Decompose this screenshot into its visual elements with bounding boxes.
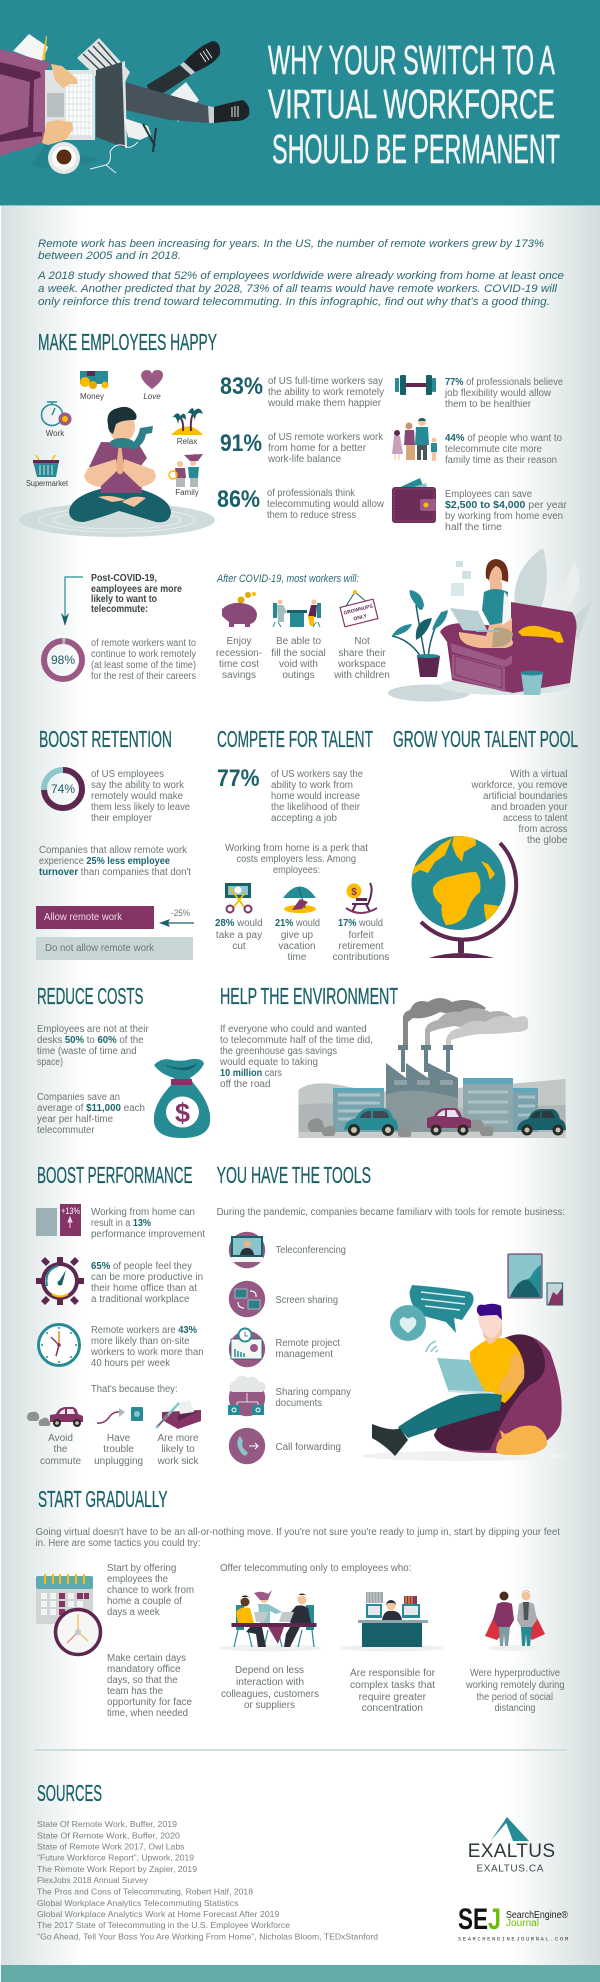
stat: 86% stress: them to reduce stress <box>267 510 356 521</box>
text: turnover: turnover than companies that don't <box>39 867 191 878</box>
stat: 91% balance: from home for a better <box>268 443 367 454</box>
text: hyperproductive: the period of social <box>476 1692 553 1703</box>
text: not at desks: desks 50% to 60% of the <box>37 1035 144 1046</box>
text: children: Not <box>354 636 370 647</box>
text: 13% <box>91 1207 205 1240</box>
icon: purple car <box>427 1108 471 1136</box>
text: less interaction <box>221 1665 319 1711</box>
text: vacation: time <box>288 952 307 963</box>
icon: piggy bank <box>222 592 257 627</box>
text: pay cut: take a pay <box>216 930 262 941</box>
text: 43%: 40 hours per week <box>91 1358 171 1369</box>
text: 98% stat: (at least some of the time) <box>91 660 196 671</box>
sources list: The Pros and Cons of Telecommuting, Robert Half, 2018 <box>37 1887 253 1897</box>
sources list: State Of Remote Work, Buffer, 2019 <box>37 1819 177 1829</box>
stat: savings: $2,500 to $4,000 per year <box>445 500 568 511</box>
stat: 91% balance: 91% <box>220 430 262 457</box>
illustration: person working on laptop from above <box>0 34 249 174</box>
panel: grow your talent pool <box>393 726 578 958</box>
stat: 91% balance: work-life balance <box>267 454 341 465</box>
text: turnover: experience 25% less employee <box>39 856 170 867</box>
illustration: man in beanbag with laptop <box>361 1254 565 1461</box>
heading: YOU HAVE THE TOOLS <box>217 1162 371 1188</box>
illustration: focused worker at desk <box>340 1592 444 1652</box>
text: 74% stat: them less likely to leave <box>91 802 190 813</box>
title <box>268 37 560 172</box>
illustration: globe <box>412 835 516 958</box>
text: 13%: result in a 13% <box>91 1218 151 1229</box>
text: social void: void with <box>279 659 318 670</box>
text: 74% stat: their employer <box>91 813 153 824</box>
text: greenhouse savings: would equate to taking <box>219 1057 318 1068</box>
stat: 83% happier: the ability to work remotely <box>268 387 384 398</box>
text: greenhouse savings: 10 million cars <box>220 1068 282 1079</box>
text: children: workspace <box>337 659 386 670</box>
tool: screen sharing <box>229 1281 338 1317</box>
tool: call forwarding: Call forwarding <box>276 1442 341 1453</box>
text: avoid: commute <box>40 1456 81 1467</box>
icon: grownups only sign: GROWNUPS <box>343 603 374 617</box>
sources list: State Of Remote Work, Buffer, 2020 <box>37 1830 180 1840</box>
illustration: factory, buildings and cars <box>298 998 566 1138</box>
text: 43%: workers to work more than <box>90 1347 204 1358</box>
text: complex tasks <box>350 1668 436 1714</box>
callout: post-COVID heading: telecommute: <box>91 604 148 615</box>
text: start intro: Going virtual doesn't have to be an all-or-nothing move. If you're not sure you're ready to jump in, start by dipping your feet <box>36 1527 560 1538</box>
text: virtual workforce: artificial boundaries <box>483 791 568 802</box>
text: 74% stat: remotely would make <box>91 791 183 802</box>
text: not at desks: time (waste of time and <box>37 1046 137 1057</box>
panel: boost retention <box>36 726 194 960</box>
text: unplugging: Have <box>107 1433 131 1444</box>
text: sick: likely to <box>161 1444 195 1455</box>
text: hyperproductive <box>465 1668 564 1714</box>
tool: teleconferencing <box>229 1232 346 1268</box>
bar chart: +13%: +13% <box>61 1206 80 1216</box>
intro text: a week. Another predicted that by 2028, 73% of all teams would have remote workers. COVID-19 will <box>38 283 558 295</box>
heading: BOOST RETENTION <box>39 726 172 752</box>
text: 74% stat: of US employees <box>91 769 164 780</box>
icon: relax island <box>171 408 203 446</box>
text: 65%: their home office than at <box>91 1283 197 1294</box>
text: cost savings: savings <box>222 670 256 681</box>
text: less interaction: interaction with <box>236 1677 304 1688</box>
text: tools intro: During the pandemic, companies became familiarv with tools for remote business: <box>217 1207 565 1218</box>
stat: 77% healthier: job flexibility would allow <box>444 388 552 399</box>
stat: 77% healthier: them to be healthier <box>445 399 532 410</box>
tool: sharing documents: documents <box>276 1398 322 1409</box>
text: complex tasks: Are responsible for <box>350 1668 436 1679</box>
text: turnover <box>39 845 191 878</box>
icon: money bag: $ <box>175 1098 190 1128</box>
text: retirement: 17% would <box>338 918 383 929</box>
sources list: Global Workplace Analytics Work at Home Forecast After 2019 <box>37 1909 280 1919</box>
stat: 77%: ability to work from <box>271 780 353 791</box>
text: vacation <box>275 918 320 963</box>
intro text: A 2018 study showed that 52% of employees worldwide were already working from home at least once <box>37 270 564 282</box>
text: because: That's because they: <box>91 1384 178 1395</box>
text: turnover: Companies that allow remote work <box>39 845 188 856</box>
logo: Search Engine Journal: SE <box>458 1903 488 1936</box>
icon: grownups only sign <box>340 590 378 627</box>
logo: Exaltus: EXALTUS <box>468 1841 555 1862</box>
text: social void <box>271 636 326 681</box>
text: tactic one: home a couple of <box>107 1596 182 1607</box>
stat: 44% family time: family time as their reason <box>445 455 557 466</box>
header banner <box>0 0 600 206</box>
tool: project management: management <box>276 1349 333 1360</box>
logo: Search Engine Journal: SEARCHENGINEJOURNAL.COM <box>458 1936 568 1943</box>
text: tactic two: mandatory office <box>107 1664 181 1675</box>
callout: post-COVID heading <box>91 573 182 615</box>
text: perk: costs employers less. Among <box>236 854 356 865</box>
donut chart: 98% <box>43 640 83 680</box>
text: 13%: performance improvement <box>91 1229 205 1240</box>
text: unplugging: unplugging <box>94 1456 143 1467</box>
text: virtual workforce: With a virtual <box>510 769 568 780</box>
heading: MAKE EMPLOYEES HAPPY <box>38 329 217 355</box>
text: children <box>333 636 390 681</box>
text: not at desks: space) <box>37 1057 63 1068</box>
text: 65%: a traditional workplace <box>91 1294 190 1305</box>
text: 65% <box>91 1261 203 1305</box>
logo: Search Engine Journal <box>458 1903 569 1943</box>
sources list: "Future Workforce Report", Upwork, 2019 <box>37 1853 194 1863</box>
icon: love: Love <box>143 392 161 401</box>
heading: REDUCE COSTS <box>37 983 144 1009</box>
heading: START GRADUALLY <box>38 1486 168 1512</box>
stat: 86% stress: 86% <box>217 486 260 513</box>
text: vacation: 21% would <box>275 918 320 929</box>
icon: cut pay <box>225 883 252 912</box>
icon: clock <box>38 1324 80 1366</box>
icon: supermarket basket <box>26 455 69 488</box>
text: 74% stat: say the ability to work <box>91 780 185 791</box>
donut chart: 98%: 98% <box>51 653 75 667</box>
text: 13%: Working from home can <box>91 1207 195 1218</box>
icon: plug <box>97 1407 143 1423</box>
icon: wallet <box>392 478 436 523</box>
heading: SOURCES <box>37 1780 102 1806</box>
text: unplugging <box>94 1433 143 1467</box>
donut chart: 74%: 74% <box>51 782 75 796</box>
text: retirement: forfeit <box>348 930 374 941</box>
donut chart: 74% <box>44 770 82 808</box>
icon: supermarket basket: Supermarket <box>26 479 69 488</box>
icon: relax island: Relax <box>177 437 197 446</box>
stat: 91% balance <box>220 430 384 465</box>
stat: 77%: of US workers say the <box>271 769 363 780</box>
icon: money bag <box>154 1059 210 1138</box>
icon: work stopwatch and gear <box>42 402 72 438</box>
text: perk: Working from home is a perk that <box>225 843 368 854</box>
text: greenhouse savings: to telecommute half of the time did, <box>220 1035 373 1046</box>
text: sick: Are more <box>157 1433 199 1444</box>
text: children: share their <box>338 648 386 659</box>
arrow: down to donut <box>61 577 83 626</box>
sources list: State of Remote Work 2017, Owl Labs <box>37 1842 185 1852</box>
sources list: "Go Ahead, Tell Your Boss You Are Working From Home", Nicholas Bloom, TEDxStanford <box>37 1931 378 1941</box>
text: vacation: vacation <box>278 941 316 952</box>
callout: post-COVID heading: eamployees are more <box>91 584 182 595</box>
stat: savings: half the time <box>445 522 502 533</box>
stat: 44% family time: 44% of people who want to <box>445 433 562 444</box>
text: tactic two: days, so that the <box>107 1675 178 1686</box>
text: perk <box>225 843 368 876</box>
text: social void: fill the social <box>271 648 326 659</box>
stat: 86% stress: telecommuting would allow <box>267 499 385 510</box>
icon: calendar and clock <box>36 1574 100 1654</box>
text: savings: year per half-time <box>37 1114 113 1125</box>
tool: sharing documents: Sharing company <box>276 1387 351 1398</box>
intro text <box>37 238 564 308</box>
subheading: after COVID: After COVID-19, most workers will: <box>216 573 359 585</box>
stat: 83% happier: 83% <box>220 373 263 400</box>
text: start intro: in. Here are some tactics you could try: <box>36 1538 200 1549</box>
tool: call forwarding <box>229 1428 341 1464</box>
icon: family group <box>392 418 437 461</box>
logo: Search Engine Journal: Journal <box>506 1918 539 1929</box>
text: retirement: retirement <box>338 941 384 952</box>
panel: sources <box>37 1780 569 1943</box>
icon: teal car <box>344 1108 398 1136</box>
text: 98% stat: for the rest of their careers <box>91 671 196 682</box>
bar chart: turnover: -25% <box>171 908 190 918</box>
bar chart: turnover <box>36 906 194 960</box>
stat: 86% stress <box>217 486 385 521</box>
text: 98% stat: continue to work remotely <box>91 649 196 660</box>
stat: savings <box>445 489 568 533</box>
stat: 77%: 77% <box>217 765 260 792</box>
icon: beach umbrella <box>283 886 316 913</box>
text: tactic one: days a week <box>107 1607 161 1618</box>
tool: teleconferencing: Teleconferencing <box>276 1245 346 1256</box>
text: complex tasks: concentration <box>362 1703 423 1714</box>
stat: 77% healthier: 77% of professionals believe <box>445 377 563 388</box>
icon: car with smoke <box>27 1407 83 1427</box>
text: tactic two: Make certain days <box>107 1653 186 1664</box>
text: not at desks: Employees are not at their <box>37 1024 149 1035</box>
text: vacation: give up <box>281 930 314 941</box>
text: greenhouse savings: the greenhouse gas savings <box>220 1046 337 1057</box>
panel: post-COVID <box>43 548 592 702</box>
panel: help the environment <box>219 983 566 1138</box>
text: tactic two: team has the <box>107 1686 163 1697</box>
stat: savings: by working from home even <box>445 511 563 522</box>
panel: compete for talent <box>215 726 389 963</box>
icon: gauge gear <box>36 1257 84 1305</box>
stat: 83% happier: would make them happier <box>267 398 382 409</box>
icon: love <box>141 370 163 401</box>
illustration: woman on sofa with laptop and plant <box>388 548 592 702</box>
sources list: The 2017 State of Telecommuting in the U.S. Employee Workforce <box>37 1920 290 1930</box>
intro text: Remote work has been increasing for years. In the US, the number of remote workers grew by 173% <box>38 238 544 250</box>
text: 43% <box>90 1325 204 1369</box>
text: 43%: more likely than on-site <box>91 1336 190 1347</box>
stat: 77% <box>217 765 363 824</box>
text: not at desks <box>37 1024 149 1068</box>
text: cost savings <box>216 636 262 681</box>
text: less interaction: Depend on less <box>235 1665 304 1676</box>
text: savings: telecommuter <box>37 1125 95 1136</box>
text: 65%: 65% of people feel they <box>91 1261 192 1272</box>
text: start intro <box>36 1527 560 1549</box>
text: tactic one: employees the <box>107 1574 168 1585</box>
stat: savings: Employees can save <box>445 489 532 500</box>
logo: Search Engine Journal: J <box>488 1903 501 1936</box>
text: hyperproductive: distancing <box>494 1703 536 1714</box>
icon: thermometer in tissue box <box>156 1400 201 1429</box>
text: virtual workforce: and broaden your <box>491 802 568 813</box>
icon: dark teal car <box>517 1109 566 1136</box>
icon: family <box>169 454 203 497</box>
text: avoid: Avoid <box>48 1433 73 1444</box>
stat: 86% stress: of professionals think <box>267 488 356 499</box>
illustration: meditating man with life icons <box>19 370 215 537</box>
text: unplugging: trouble <box>103 1444 134 1455</box>
text: less interaction: or suppliers <box>244 1700 295 1711</box>
bar chart: turnover: Do not allow remote work <box>45 943 155 954</box>
stat: 77%: home would increase <box>271 791 360 802</box>
stat: 83% happier <box>220 373 384 409</box>
logo: Exaltus <box>468 1817 555 1875</box>
logo: Search Engine Journal: SearchEngine® <box>506 1910 569 1921</box>
text: sick: work sick <box>156 1456 200 1467</box>
icon: rocking chair and coin: $ <box>351 887 357 898</box>
text: virtual workforce: the globe <box>527 835 568 846</box>
bar chart: turnover: Allow remote work <box>44 912 123 923</box>
illustration: two superhero workers <box>485 1590 545 1651</box>
text: 98% stat <box>91 638 196 682</box>
panel: boost performance <box>27 1162 205 1467</box>
text: greenhouse savings: off the road <box>220 1079 271 1090</box>
text: tactic two: opportunity for face <box>107 1697 192 1708</box>
icon: rocking chair and coin <box>346 883 377 913</box>
text: social void: outings <box>282 670 315 681</box>
text: children: with children <box>333 670 390 681</box>
text: tactic one <box>107 1563 194 1618</box>
logo: Exaltus: EXALTUS.CA <box>476 1864 544 1875</box>
illustration: team around table <box>218 1590 322 1652</box>
panel: start gradually <box>36 1486 565 1719</box>
text: pay cut <box>215 918 262 952</box>
text: savings: average of $11,000 each <box>37 1103 145 1114</box>
text: complex tasks: require greater <box>359 1692 427 1703</box>
text: perk: employees: <box>273 865 320 876</box>
icon: grownups only sign: ONLY <box>353 613 368 622</box>
text: greenhouse savings: If everyone who could and wanted <box>220 1024 367 1035</box>
intro text: only reinforce this trend toward telecommuting. In this infographic, find out why that's a good thing. <box>38 296 550 308</box>
text: cost savings: recession- <box>216 648 262 659</box>
panel: reduce costs <box>37 983 210 1138</box>
sources list: Global Workplace Analytics Telecommuting Statistics <box>37 1898 239 1908</box>
text: 65%: can be more productive in <box>91 1272 203 1283</box>
text: 43%: Remote workers are 43% <box>91 1325 197 1336</box>
sources list: FlexJobs 2018 Annual Survey <box>37 1875 149 1885</box>
heading: BOOST PERFORMANCE <box>37 1162 192 1188</box>
tool: project management: Remote project <box>276 1338 340 1349</box>
text: savings <box>37 1092 145 1136</box>
tool: screen sharing: Screen sharing <box>276 1295 338 1306</box>
text: sick <box>156 1433 200 1467</box>
text: pay cut: cut <box>232 941 246 952</box>
tool: sharing documents <box>228 1376 351 1416</box>
text: cost savings: time cost <box>219 659 259 670</box>
icon: money <box>80 371 108 401</box>
text: virtual workforce: from across <box>518 824 568 835</box>
text: hyperproductive: Were hyperproductive <box>470 1668 560 1679</box>
text: tactic two <box>107 1653 192 1719</box>
intro text: between 2005 and in 2018. <box>38 250 181 262</box>
icon: dumbbell <box>395 375 436 395</box>
text: 74% stat <box>91 769 190 824</box>
text: cost savings: Enjoy <box>226 636 252 647</box>
text: avoid: the <box>54 1444 68 1455</box>
text: complex tasks: complex tasks that <box>350 1680 435 1691</box>
heading: COMPETE FOR TALENT <box>217 726 373 752</box>
text: tactic one: Start by offering <box>107 1563 176 1574</box>
stat: 83% happier: of US full-time workers say <box>268 376 383 387</box>
text: avoid <box>40 1433 81 1467</box>
text: pay cut: 28% would <box>215 918 262 929</box>
text: 98% stat: of remote workers want to <box>91 638 196 649</box>
text: offer telecommuting: Offer telecommuting only to employees who: <box>220 1563 411 1574</box>
callout: post-COVID heading: likely to want to <box>91 594 157 605</box>
icon: family: Family <box>175 488 199 497</box>
text: virtual workforce: workforce, you remove <box>471 780 568 791</box>
text: savings: Companies save an <box>37 1092 120 1103</box>
text: greenhouse savings <box>219 1024 373 1090</box>
heading: HELP THE ENVIRONMENT <box>220 983 398 1009</box>
text: social void: Be able to <box>276 636 321 647</box>
text: virtual workforce <box>471 769 568 846</box>
icon: money: Money <box>80 392 104 401</box>
text: hyperproductive: working remotely during <box>465 1680 564 1691</box>
text: retirement <box>333 918 389 963</box>
stat: 77% healthier <box>444 377 563 410</box>
sources list <box>37 1819 378 1941</box>
icon: meeting <box>273 600 321 627</box>
callout: post-COVID heading: Post-COVID-19, <box>91 573 157 584</box>
panel: make employees happy <box>19 329 568 537</box>
text: virtual workforce: access to talent <box>503 813 568 824</box>
text: tactic one: chance to work from <box>107 1585 194 1596</box>
stat: 44% family time: telecommute cite more <box>445 444 542 455</box>
text: tactic two: time, when needed <box>107 1708 188 1719</box>
icon: work stopwatch and gear: Work <box>46 429 65 438</box>
stat: 44% family time <box>445 433 562 466</box>
bar chart: +13% <box>36 1204 81 1236</box>
stat: 77%: the likelihood of their <box>271 802 361 813</box>
text: less interaction: colleagues, customers <box>221 1689 319 1700</box>
stat: 77%: accepting a job <box>271 813 337 824</box>
sources list: The Remote Work Report by Zapier, 2019 <box>37 1864 197 1874</box>
stat: 91% balance: of US remote workers work <box>268 432 384 443</box>
tool: project management <box>229 1328 340 1367</box>
text: retirement: contributions <box>333 952 389 963</box>
panel: you have the tools <box>217 1162 565 1464</box>
